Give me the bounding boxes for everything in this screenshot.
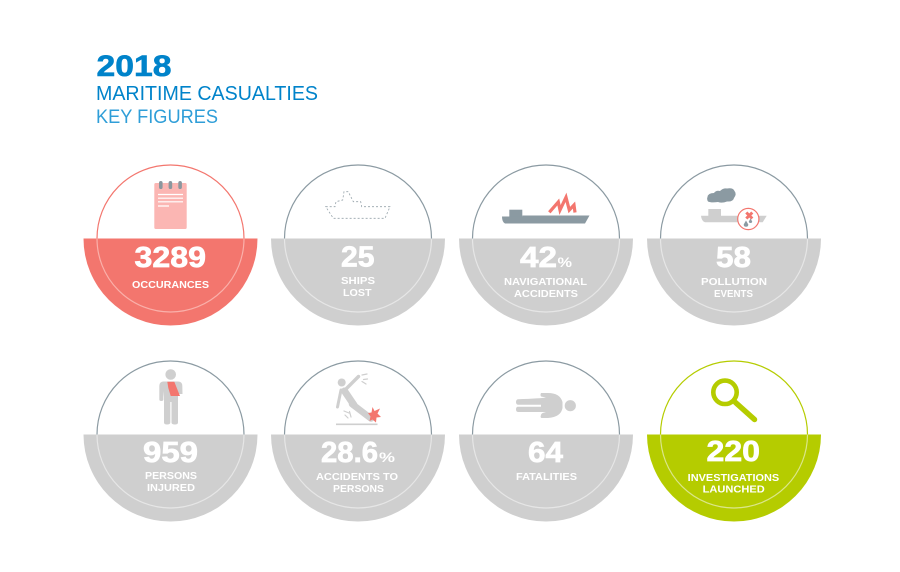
label: navigational accidents: ACCIDENTS xyxy=(514,288,578,300)
label: investigations launched xyxy=(688,472,779,496)
panel: occurrences xyxy=(84,165,258,326)
label: accidents to persons xyxy=(316,471,398,495)
title block xyxy=(96,50,318,128)
label: ships lost: SHIPS xyxy=(341,275,375,287)
value: 28.6%: % xyxy=(379,449,396,465)
label: ships lost: LOST xyxy=(343,287,372,299)
icon: magnifying glass xyxy=(713,381,754,420)
value: 28.6%: 28.6 xyxy=(321,437,378,469)
panel: persons injured xyxy=(84,361,258,522)
title: year: 2018 xyxy=(96,50,172,83)
label: pollution events xyxy=(701,276,767,300)
value: 42%: % xyxy=(558,254,573,270)
value: 64: 64 xyxy=(528,437,563,469)
value: 220: 220 xyxy=(706,436,760,468)
value: 959: 959 xyxy=(143,437,198,469)
panel: pollution events xyxy=(647,165,821,326)
panel: navigational accidents xyxy=(459,165,633,326)
icon: tanker with crack xyxy=(502,197,590,224)
label: persons injured: INJURED xyxy=(147,482,195,494)
value: 3289: 3289 xyxy=(134,242,206,274)
label: accidents to persons: PERSONS xyxy=(333,483,384,495)
label: investigations launched: INVESTIGATIONS xyxy=(688,472,779,484)
panel: fatalities xyxy=(459,361,633,522)
label: pollution events: EVENTS xyxy=(714,288,753,300)
icon: ship with smoke and spill xyxy=(701,188,767,230)
panel: investigations launched xyxy=(647,361,821,522)
icon: dashed ship outline xyxy=(326,192,390,218)
label: navigational accidents: NAVIGATIONAL xyxy=(504,276,588,288)
label: fatalities: FATALITIES xyxy=(516,471,577,483)
label: pollution events: POLLUTION xyxy=(701,276,767,288)
icon: lying body xyxy=(516,393,576,418)
label: navigational accidents xyxy=(504,276,588,300)
panel: accidents to persons xyxy=(271,361,445,522)
value: 58: 58 xyxy=(716,242,751,274)
label: accidents to persons: ACCIDENTS TO xyxy=(316,471,398,483)
value: 25: 25 xyxy=(341,242,374,274)
label: ships lost xyxy=(341,275,375,299)
subheading: key figures: KEY FIGURES xyxy=(96,106,218,128)
label: persons injured: PERSONS xyxy=(145,470,197,482)
icon: injured person with sling xyxy=(159,369,182,424)
label: persons injured xyxy=(145,470,197,494)
heading: maritime casualties: MARITIME CASUALTIES xyxy=(96,83,318,105)
icon: person falling xyxy=(336,374,381,424)
value: 42%: 42 xyxy=(520,242,557,274)
label: occurances: OCCURANCES xyxy=(132,279,209,291)
label: investigations launched: LAUNCHED xyxy=(703,484,765,496)
panel: ships lost xyxy=(271,165,445,326)
value: 42% xyxy=(520,242,573,274)
icon: notebook xyxy=(154,181,187,229)
